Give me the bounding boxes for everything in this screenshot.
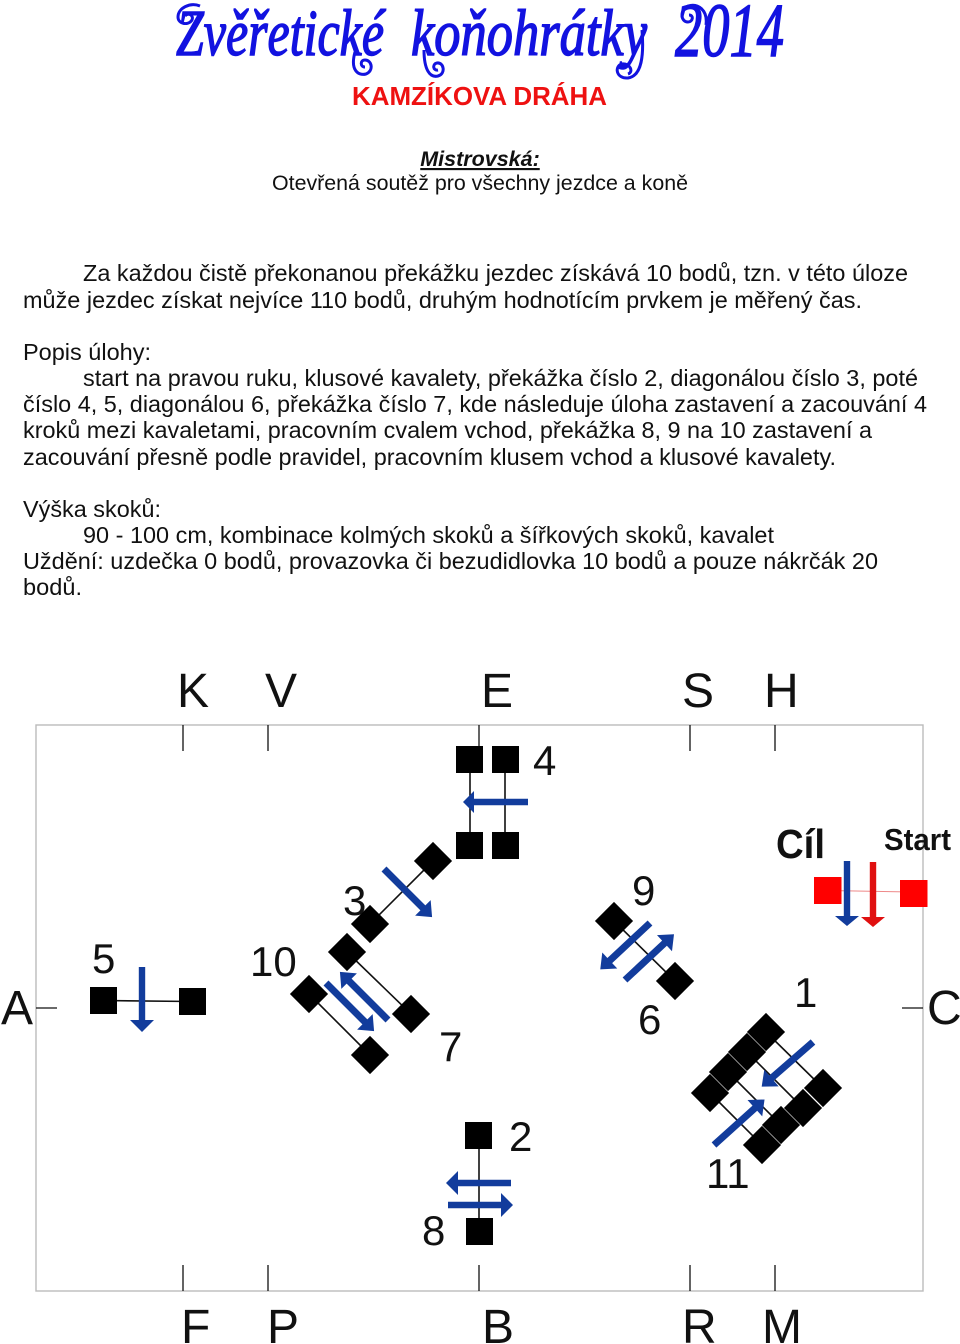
arena letters: K [177,665,209,718]
task description: zacouvání přesně podle pravidel, pracovním klusem vchod a klusové kavalety. [23,444,836,470]
category description: Otevřená soutěž pro všechny jezdce a koně [272,171,688,195]
jump heights and tack: 90 - 100 cm, kombinace kolmých skoků a šířkových skoků, kavalet [83,522,774,548]
obstacle 1 and 11 cavaletti [691,1013,842,1164]
arena tick marks [36,725,923,1291]
category heading: Mistrovská: [420,147,540,171]
arena letters: E [481,665,513,718]
jump heights and tack: bodů. [23,574,82,600]
arena letters: A [1,982,33,1035]
start and finish gate [814,861,928,927]
arena letters: H [764,665,799,718]
obstacle 9 and 6 [593,902,694,1000]
obstacle 7 and 10 [290,933,430,1074]
jump heights and tack: Uždění: uzdečka 0 bodů, provazovka či bezudidlovka 10 bodů a pouze nákrčák 20 [23,548,878,574]
scoring paragraph [23,260,908,313]
obstacle numbers: 3 [343,877,366,924]
obstacle numbers: 11 [706,1150,750,1197]
obstacle numbers: 5 [92,935,115,982]
task description: Popis úlohy: [23,339,151,365]
obstacle 3 [351,842,452,943]
arena letters [1,665,960,1344]
subtitle: KAMZÍKOVA DRÁHA [352,81,607,111]
obstacle numbers: 1 [794,969,817,1016]
jump heights and tack: Výška skoků: [23,496,161,522]
title [176,0,784,78]
arena diagram [1,665,960,1344]
scoring paragraph: Za každou čistě překonanou překážku jezdec získává 10 bodů, tzn. v této úloze [83,260,908,286]
obstacle numbers: 8 [422,1207,445,1254]
start label: Start [884,822,951,857]
jump heights and tack [23,496,878,600]
obstacle numbers: 10 [250,938,297,985]
arena letters: V [265,665,297,718]
obstacle numbers [92,737,817,1254]
obstacle numbers: 6 [638,996,661,1043]
task description [23,339,927,470]
obstacle 5 [90,967,206,1032]
obstacle numbers: 7 [439,1023,462,1070]
obstacle 2 and 8 [446,1122,513,1245]
obstacle numbers: 4 [533,737,556,784]
task description: číslo 4, 5, diagonálou 6, překážka číslo 7, kde následuje úloha zastavení a zacouvání 4 [23,391,927,417]
obstacle numbers: 2 [509,1113,532,1160]
task description: start na pravou ruku, klusové kavalety, překážka číslo 2, diagonálou číslo 3, poté [83,365,918,391]
scoring paragraph: může jezdec získat nejvíce 110 bodů, druhým hodnotícím prvkem je měřený čas. [23,287,862,313]
arena outline [36,725,923,1291]
obstacle 4 [456,746,528,859]
arena letters: S [682,665,714,718]
obstacle numbers: 9 [632,867,655,914]
task description: kroků mezi kavaletami, pracovním cvalem vchod, překážka 8, 9 na 10 zastavení a [23,417,873,443]
finish label: Cíl [776,821,825,867]
